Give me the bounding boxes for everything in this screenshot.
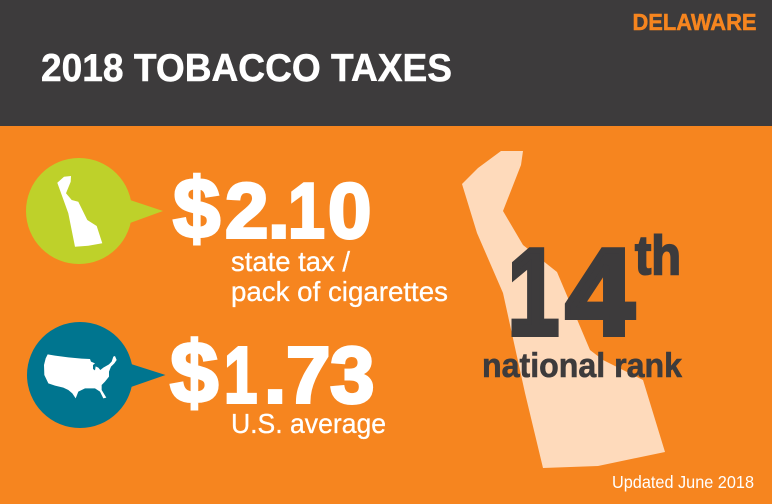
state tax amount: 2: [225, 166, 268, 254]
state tax caption: pack of cigarettes: [231, 276, 448, 307]
national rank number: 4: [566, 224, 634, 360]
state tax amount: [173, 162, 371, 256]
header band: [0, 0, 772, 126]
large Delaware silhouette: [462, 151, 665, 468]
U.S. average caption: U.S. average: [231, 408, 386, 439]
state tax amount: 1: [288, 167, 325, 255]
U.S. average amount: 7: [286, 330, 330, 420]
state tax caption: state tax /: [231, 246, 350, 277]
national rank number: 1: [508, 223, 559, 360]
U.S. average amount: $: [170, 324, 218, 422]
update note: Updated June 2018: [612, 472, 754, 492]
U.S. average amount: 3: [330, 330, 374, 420]
national rank number: [508, 223, 681, 360]
title: 2018 TOBACCO TAXES: [41, 47, 452, 90]
state name label: DELAWARE: [632, 9, 756, 35]
ordinal suffix: th: [635, 224, 681, 286]
icon: United States speech bubble: [27, 322, 166, 428]
state tax caption: [231, 246, 448, 307]
national rank caption: national rank: [482, 347, 682, 385]
U.S. average amount: 1: [224, 330, 257, 419]
U.S. average amount: [170, 324, 374, 422]
state tax amount: 0: [328, 166, 371, 254]
icon: Delaware speech bubble: [26, 158, 163, 264]
U.S. average amount: .: [264, 330, 286, 420]
state tax amount: .: [268, 166, 290, 254]
state tax amount: $: [173, 162, 220, 256]
